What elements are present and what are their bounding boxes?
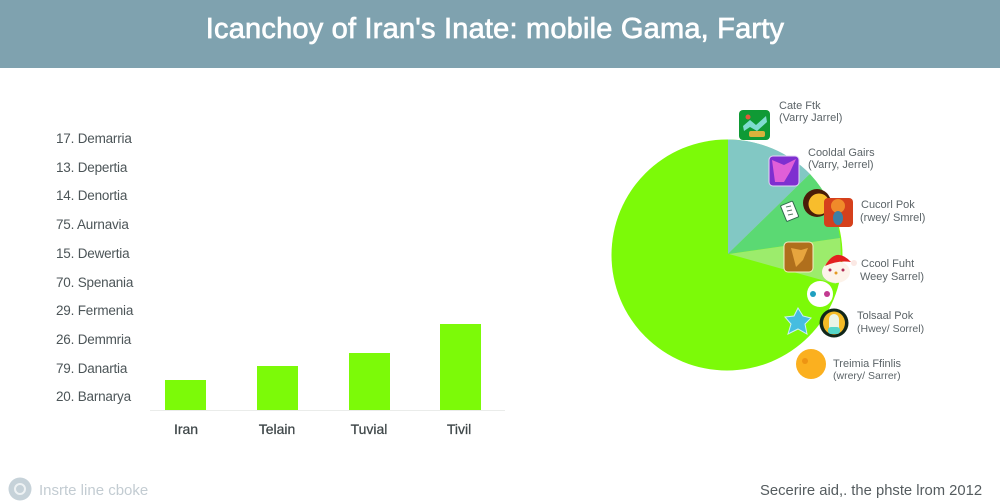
row labels: 26. Demmria xyxy=(56,332,132,347)
label: Tolsaal Pok: (Hwey/ Sorrel) xyxy=(857,323,924,335)
row labels: 15. Dewertia xyxy=(56,246,130,261)
row labels: 75. Aurnavia xyxy=(56,217,129,232)
label: Cucorl Pok: (rwey/ Smrel) xyxy=(860,212,925,224)
label: Cucorl Pok xyxy=(860,199,925,224)
pie labels xyxy=(779,100,925,382)
icon: purple game xyxy=(769,156,799,186)
icon: card xyxy=(780,201,799,222)
bar labels: Iran xyxy=(174,421,198,437)
pie chart xyxy=(612,140,842,370)
label: Ccool Fuli: Ccool Fuht xyxy=(861,258,914,270)
bars xyxy=(165,324,481,410)
icon: green game xyxy=(739,110,770,140)
icon: white bubble xyxy=(807,281,833,307)
label: Cucorl Pok: Cucorl Pok xyxy=(861,199,915,211)
label: Ccool Fuli xyxy=(860,258,924,283)
icon: gold coin xyxy=(803,189,831,217)
bar labels xyxy=(174,421,471,437)
row labels xyxy=(56,131,134,404)
bar labels: Tuvial xyxy=(351,421,387,437)
row labels: 17. Demarria xyxy=(56,131,132,146)
header banner xyxy=(0,0,1000,68)
bar chart xyxy=(56,131,505,437)
icon: red game xyxy=(824,198,853,227)
label: Cooldal Gairs: (Varry, Jerrel) xyxy=(808,159,874,171)
footer logo note xyxy=(8,478,148,500)
bar labels: Telain xyxy=(259,421,295,437)
label: Trimia Ffinis: Treimia Ffinlis xyxy=(833,358,902,370)
footer logo note: Insrte line cboke xyxy=(39,482,148,499)
label: Cooldal Gairs xyxy=(808,147,875,171)
row labels: 29. Fermenia xyxy=(56,303,134,318)
label: Cate Pik: (Varry Jarrel) xyxy=(779,112,842,124)
label: Trimia Ffinis: (wrery/ Sarrer) xyxy=(833,370,901,382)
label: Tolsaal Pok: Tolsaal Pok xyxy=(857,310,914,322)
row labels: 79. Danartia xyxy=(56,361,128,376)
label: Trimia Ffinis xyxy=(833,358,902,382)
icon: santa face xyxy=(822,255,857,283)
row labels: 20. Barnarya xyxy=(56,389,132,404)
row labels: 13. Depertia xyxy=(56,160,128,175)
row labels: 70. Spenania xyxy=(56,275,134,290)
footer source: Secerire aid,. the phste lrom 2012 xyxy=(760,483,982,499)
label: Tolsaal Pok xyxy=(857,310,924,335)
icon: orange ball xyxy=(796,349,826,379)
icon: brown game xyxy=(784,242,813,272)
icon: penguin badge xyxy=(820,308,848,338)
label: Cooldal Gairs: Cooldal Gairs xyxy=(808,147,875,159)
icon: blue star xyxy=(785,308,811,334)
row labels: 14. Denortia xyxy=(56,188,128,203)
label: Cate Pik xyxy=(779,100,842,124)
bar labels: Tivil xyxy=(447,421,471,437)
label: Ccool Fuli: Weey Sarrel) xyxy=(860,271,924,283)
label: Cate Pik: Cate Ftk xyxy=(779,100,821,112)
title: Icanchoy of Iran's Inate: mobile Gama, Farty xyxy=(206,13,784,45)
